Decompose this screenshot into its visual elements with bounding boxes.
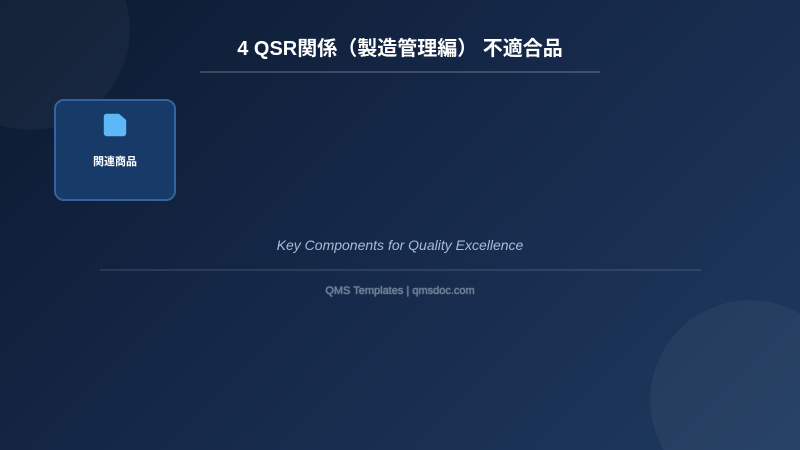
decorative circle: top left [0, 0, 130, 130]
icon: document [104, 114, 126, 136]
card label: 関連商品 [93, 156, 137, 168]
decorative circle: bottom right [650, 300, 800, 450]
panel: related products card [54, 99, 176, 201]
title: 4 QSR関係（製造管理編） 不適合品 [237, 38, 563, 60]
footer divider [100, 269, 701, 271]
subtitle: Key Components for Quality Excellence [277, 237, 523, 253]
title underline [200, 71, 600, 73]
footer text: QMS Templates | qmsdoc.com [325, 285, 475, 297]
